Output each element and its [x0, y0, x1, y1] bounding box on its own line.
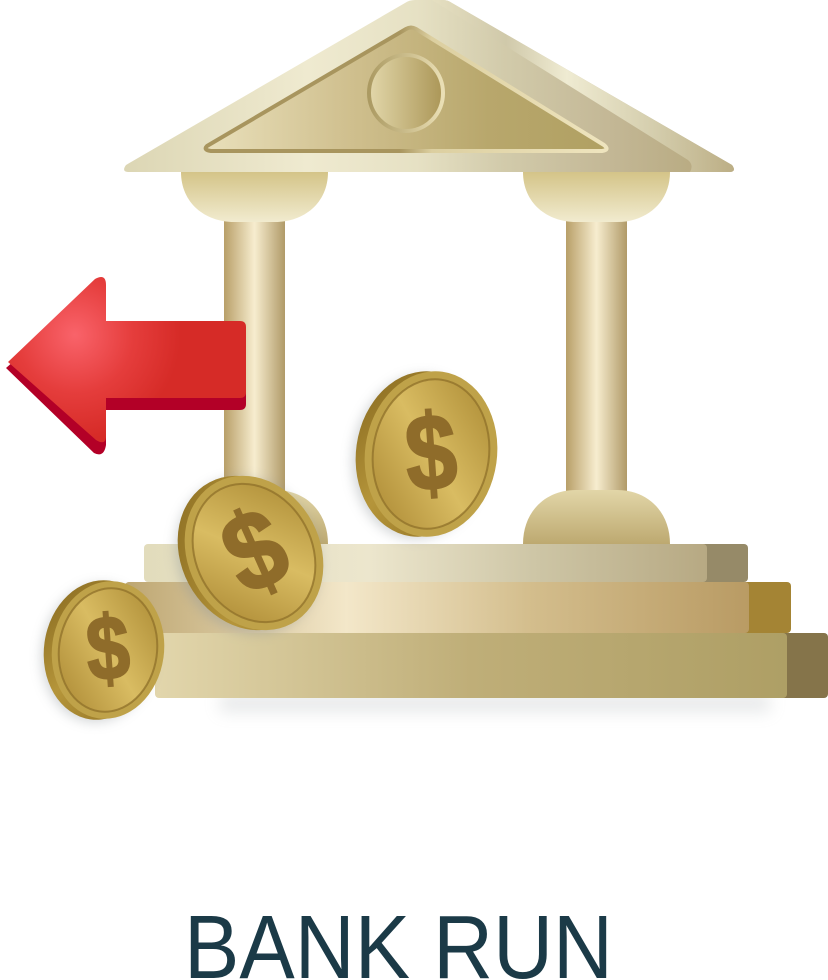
middle step	[125, 582, 791, 633]
dollar sign: $	[204, 483, 306, 619]
right column	[523, 172, 670, 544]
coin: centre	[342, 363, 508, 547]
bank building	[124, 0, 828, 712]
dollar sign: $	[83, 596, 133, 700]
dollar sign: $	[401, 391, 461, 515]
top step	[144, 544, 748, 582]
pediment medallion	[369, 55, 443, 131]
pediment roof	[124, 0, 734, 172]
coin: middle	[149, 451, 350, 659]
left column	[181, 172, 328, 544]
bottom step	[155, 633, 828, 698]
coin: lower left	[33, 573, 173, 729]
ground shadow	[220, 694, 770, 712]
arrow: outflow to the left	[6, 277, 246, 454]
